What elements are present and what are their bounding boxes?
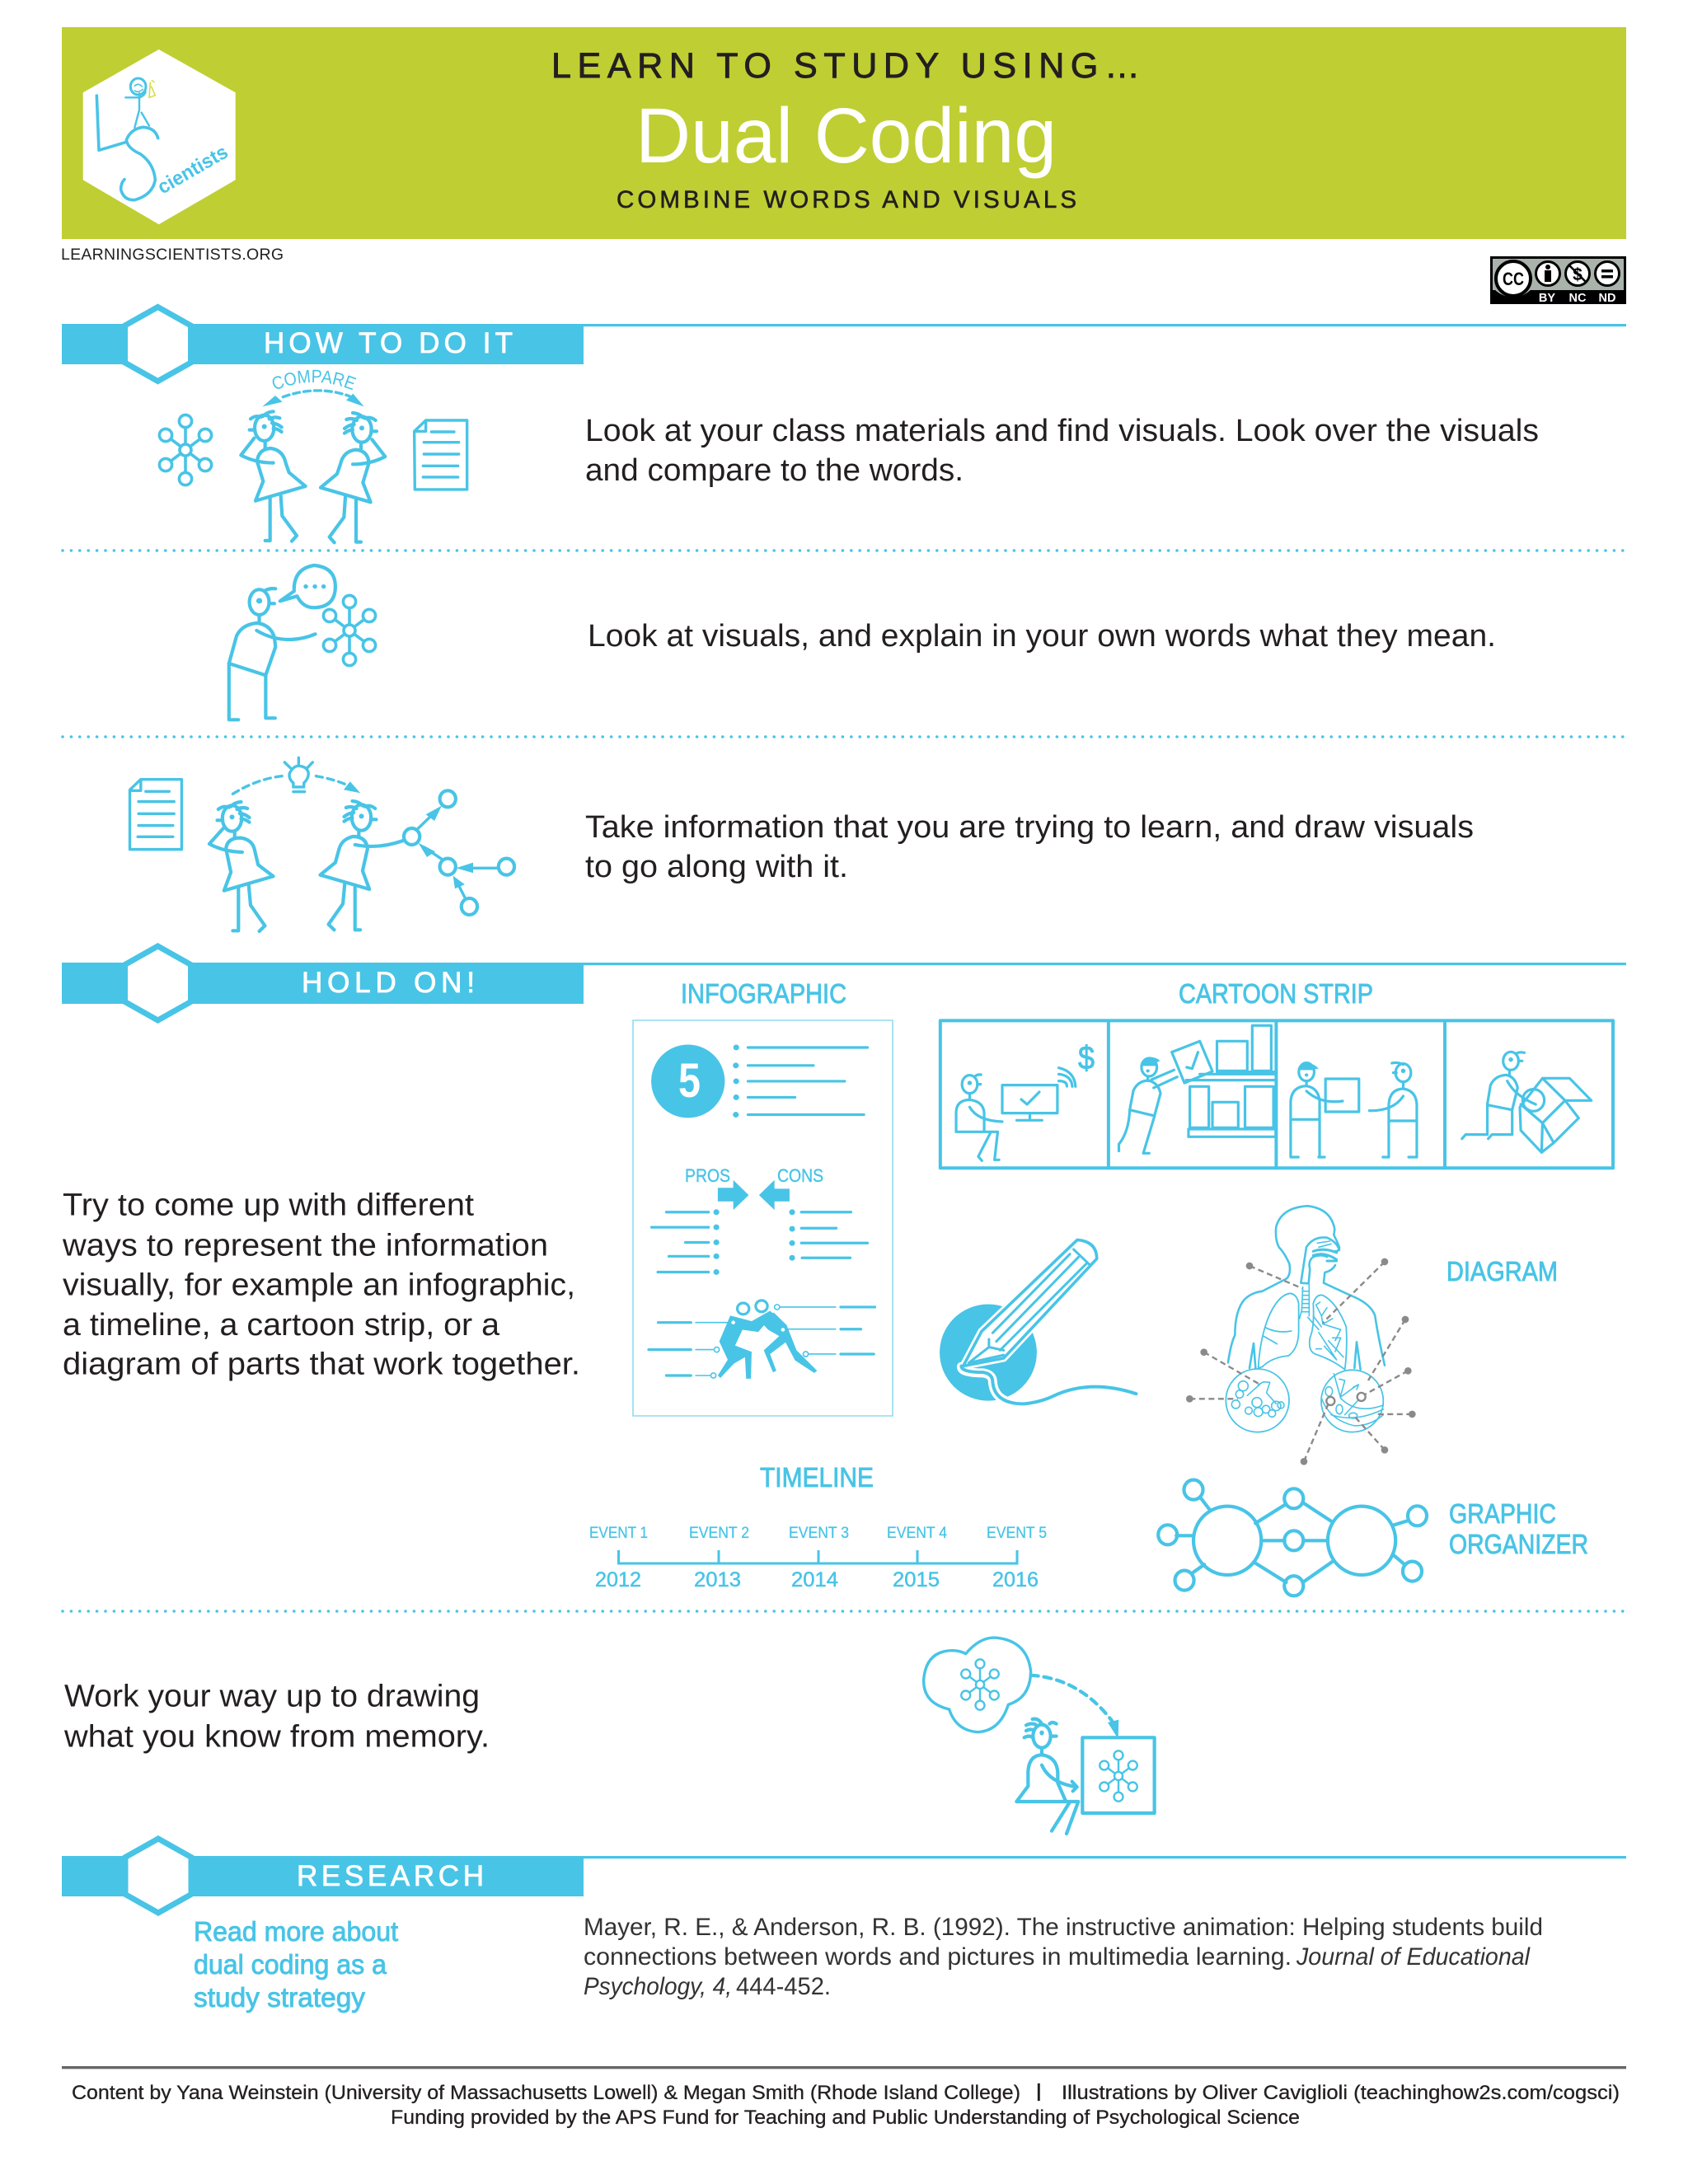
icon: network on paper	[1100, 1750, 1137, 1802]
icon: network in cloud	[961, 1659, 999, 1710]
chart: timeline: EVENT 1	[589, 1524, 648, 1542]
icon: network	[159, 415, 212, 485]
chart: timeline: EVENT 3	[789, 1524, 849, 1542]
frame 4	[1462, 1052, 1592, 1152]
panel: cartoon strip	[940, 1020, 1613, 1168]
text: citation: 444-452.	[736, 1973, 831, 2000]
text: step three: Take information that you are trying to learn, and draw visuals	[585, 810, 1474, 845]
heading: cartoon strip: CARTOON STRIP	[1179, 978, 1373, 1009]
section heading: hold on: HOLD ON!	[302, 967, 475, 999]
title: Dual Coding	[635, 92, 1057, 180]
creative commons badge: NC	[1569, 292, 1587, 305]
text: hold on: a timeline, a cartoon strip, or a	[63, 1308, 500, 1343]
logo hexagon	[83, 49, 236, 224]
kicker: LEARN TO STUDY USING…	[551, 46, 1140, 86]
label: graphic organizer	[1449, 1498, 1588, 1559]
panel: infographic example: 5	[678, 1054, 701, 1108]
icon: pencil drawing	[940, 1240, 1136, 1404]
text: hold on: diagram of parts that work together.	[63, 1347, 580, 1381]
panel: infographic example: CONS	[777, 1165, 823, 1186]
section heading: hold on	[62, 946, 1626, 1020]
website: LEARNINGSCIENTISTS.ORG	[61, 246, 284, 264]
chart: timeline: 2015	[893, 1568, 940, 1591]
chart: graphic organizer	[1158, 1480, 1427, 1596]
text: draw from memory: what you know from memory.	[63, 1719, 490, 1754]
panel: infographic example	[633, 1020, 893, 1416]
credits: Illustrations by Oliver Caviglioli (teachinghow2s.com/cogsci)	[1062, 2082, 1620, 2104]
icon: network	[323, 595, 376, 666]
creative commons badge: ND	[1599, 292, 1615, 305]
section heading: research	[62, 1839, 1626, 1913]
illustration: explain visuals	[229, 565, 376, 719]
text: citation: Mayer, R. E., & Anderson, R. B. (1992). The instructive animation: Helping students build	[584, 1914, 1543, 1941]
link: read more: study strategy	[194, 1982, 365, 2013]
number badge	[651, 1045, 724, 1118]
link: read more: dual coding as a	[194, 1949, 387, 1980]
header banner	[62, 27, 1626, 239]
text: step one	[585, 414, 1539, 488]
text: draw from memory	[63, 1680, 490, 1754]
text: step three	[585, 810, 1474, 884]
chart: timeline	[589, 1524, 1047, 1591]
text: citation: Journal of Educational	[1296, 1943, 1531, 1971]
chart: timeline: 2016	[992, 1568, 1039, 1591]
panel: infographic example: PROS	[685, 1165, 730, 1186]
text: citation: Psychology, 4,	[584, 1973, 732, 2000]
text: hold on	[62, 1188, 580, 1381]
chart: respiratory diagram	[1186, 1206, 1416, 1465]
text: step one: Look at your class materials and find visuals. Look over the visuals	[585, 414, 1539, 448]
credits: Content by Yana Weinstein (University of Massachusetts Lowell) & Megan Smith (Rhode Island College)	[72, 2082, 1020, 2104]
creative commons badge: $	[1573, 265, 1582, 284]
text: hold on: visually, for example an infographic,	[63, 1268, 575, 1302]
link: read more	[194, 1916, 398, 2013]
text: step two: Look at visuals, and explain in your own words what they mean.	[588, 619, 1496, 654]
heading: timeline: TIMELINE	[760, 1462, 874, 1493]
label: diagram: DIAGRAM	[1447, 1256, 1558, 1286]
link: read more: Read more about	[194, 1916, 398, 1947]
chart: timeline: 2012	[595, 1568, 641, 1591]
text: hold on: ways to represent the information	[62, 1228, 548, 1263]
chart: timeline: 2014	[791, 1568, 838, 1591]
icon: two people	[241, 391, 467, 542]
heading: infographic: INFOGRAPHIC	[681, 978, 846, 1009]
section heading: how to do it: HOW TO DO IT	[264, 327, 513, 359]
label: compare	[272, 369, 356, 391]
section heading: how to do it	[62, 307, 1626, 381]
section heading: research: RESEARCH	[297, 1860, 484, 1892]
creative commons badge	[1490, 256, 1626, 305]
text: step three: to go along with it.	[585, 850, 848, 884]
creative commons badge: BY	[1539, 292, 1555, 305]
label: graphic organizer: GRAPHIC	[1449, 1498, 1556, 1529]
text: citation: connections between words and pictures in multimedia learning.	[584, 1943, 1292, 1971]
illustration: drawing from memory	[924, 1638, 1155, 1834]
chart: timeline: 2013	[694, 1568, 741, 1591]
credits	[72, 2082, 1620, 2129]
frame 1	[956, 1068, 1076, 1160]
illustration: compare visuals and words	[158, 369, 468, 544]
frame 3	[1291, 1062, 1417, 1157]
creative commons badge: CC	[1503, 269, 1524, 289]
text: hold on: Try to come up with different	[63, 1188, 474, 1223]
label: compare: COMPARE	[272, 369, 356, 391]
text: step one: and compare to the words.	[585, 453, 964, 488]
credits: Funding provided by the APS Fund for Teaching and Public Understanding of Psychological Science	[391, 2107, 1300, 2129]
subtitle: COMBINE WORDS AND VISUALS	[617, 186, 1076, 213]
chart: timeline: EVENT 2	[689, 1524, 749, 1542]
illustration: draw visuals	[130, 757, 514, 931]
frame 2	[1119, 1025, 1276, 1153]
panel: cartoon strip: $	[1078, 1040, 1095, 1076]
chart: timeline: EVENT 4	[887, 1524, 947, 1542]
chart: timeline: EVENT 5	[987, 1524, 1047, 1542]
logo hexagon: cientists	[153, 141, 232, 199]
label: graphic organizer: ORGANIZER	[1449, 1529, 1588, 1559]
text: citation	[584, 1914, 1543, 2000]
text: draw from memory: Work your way up to drawing	[64, 1680, 480, 1714]
